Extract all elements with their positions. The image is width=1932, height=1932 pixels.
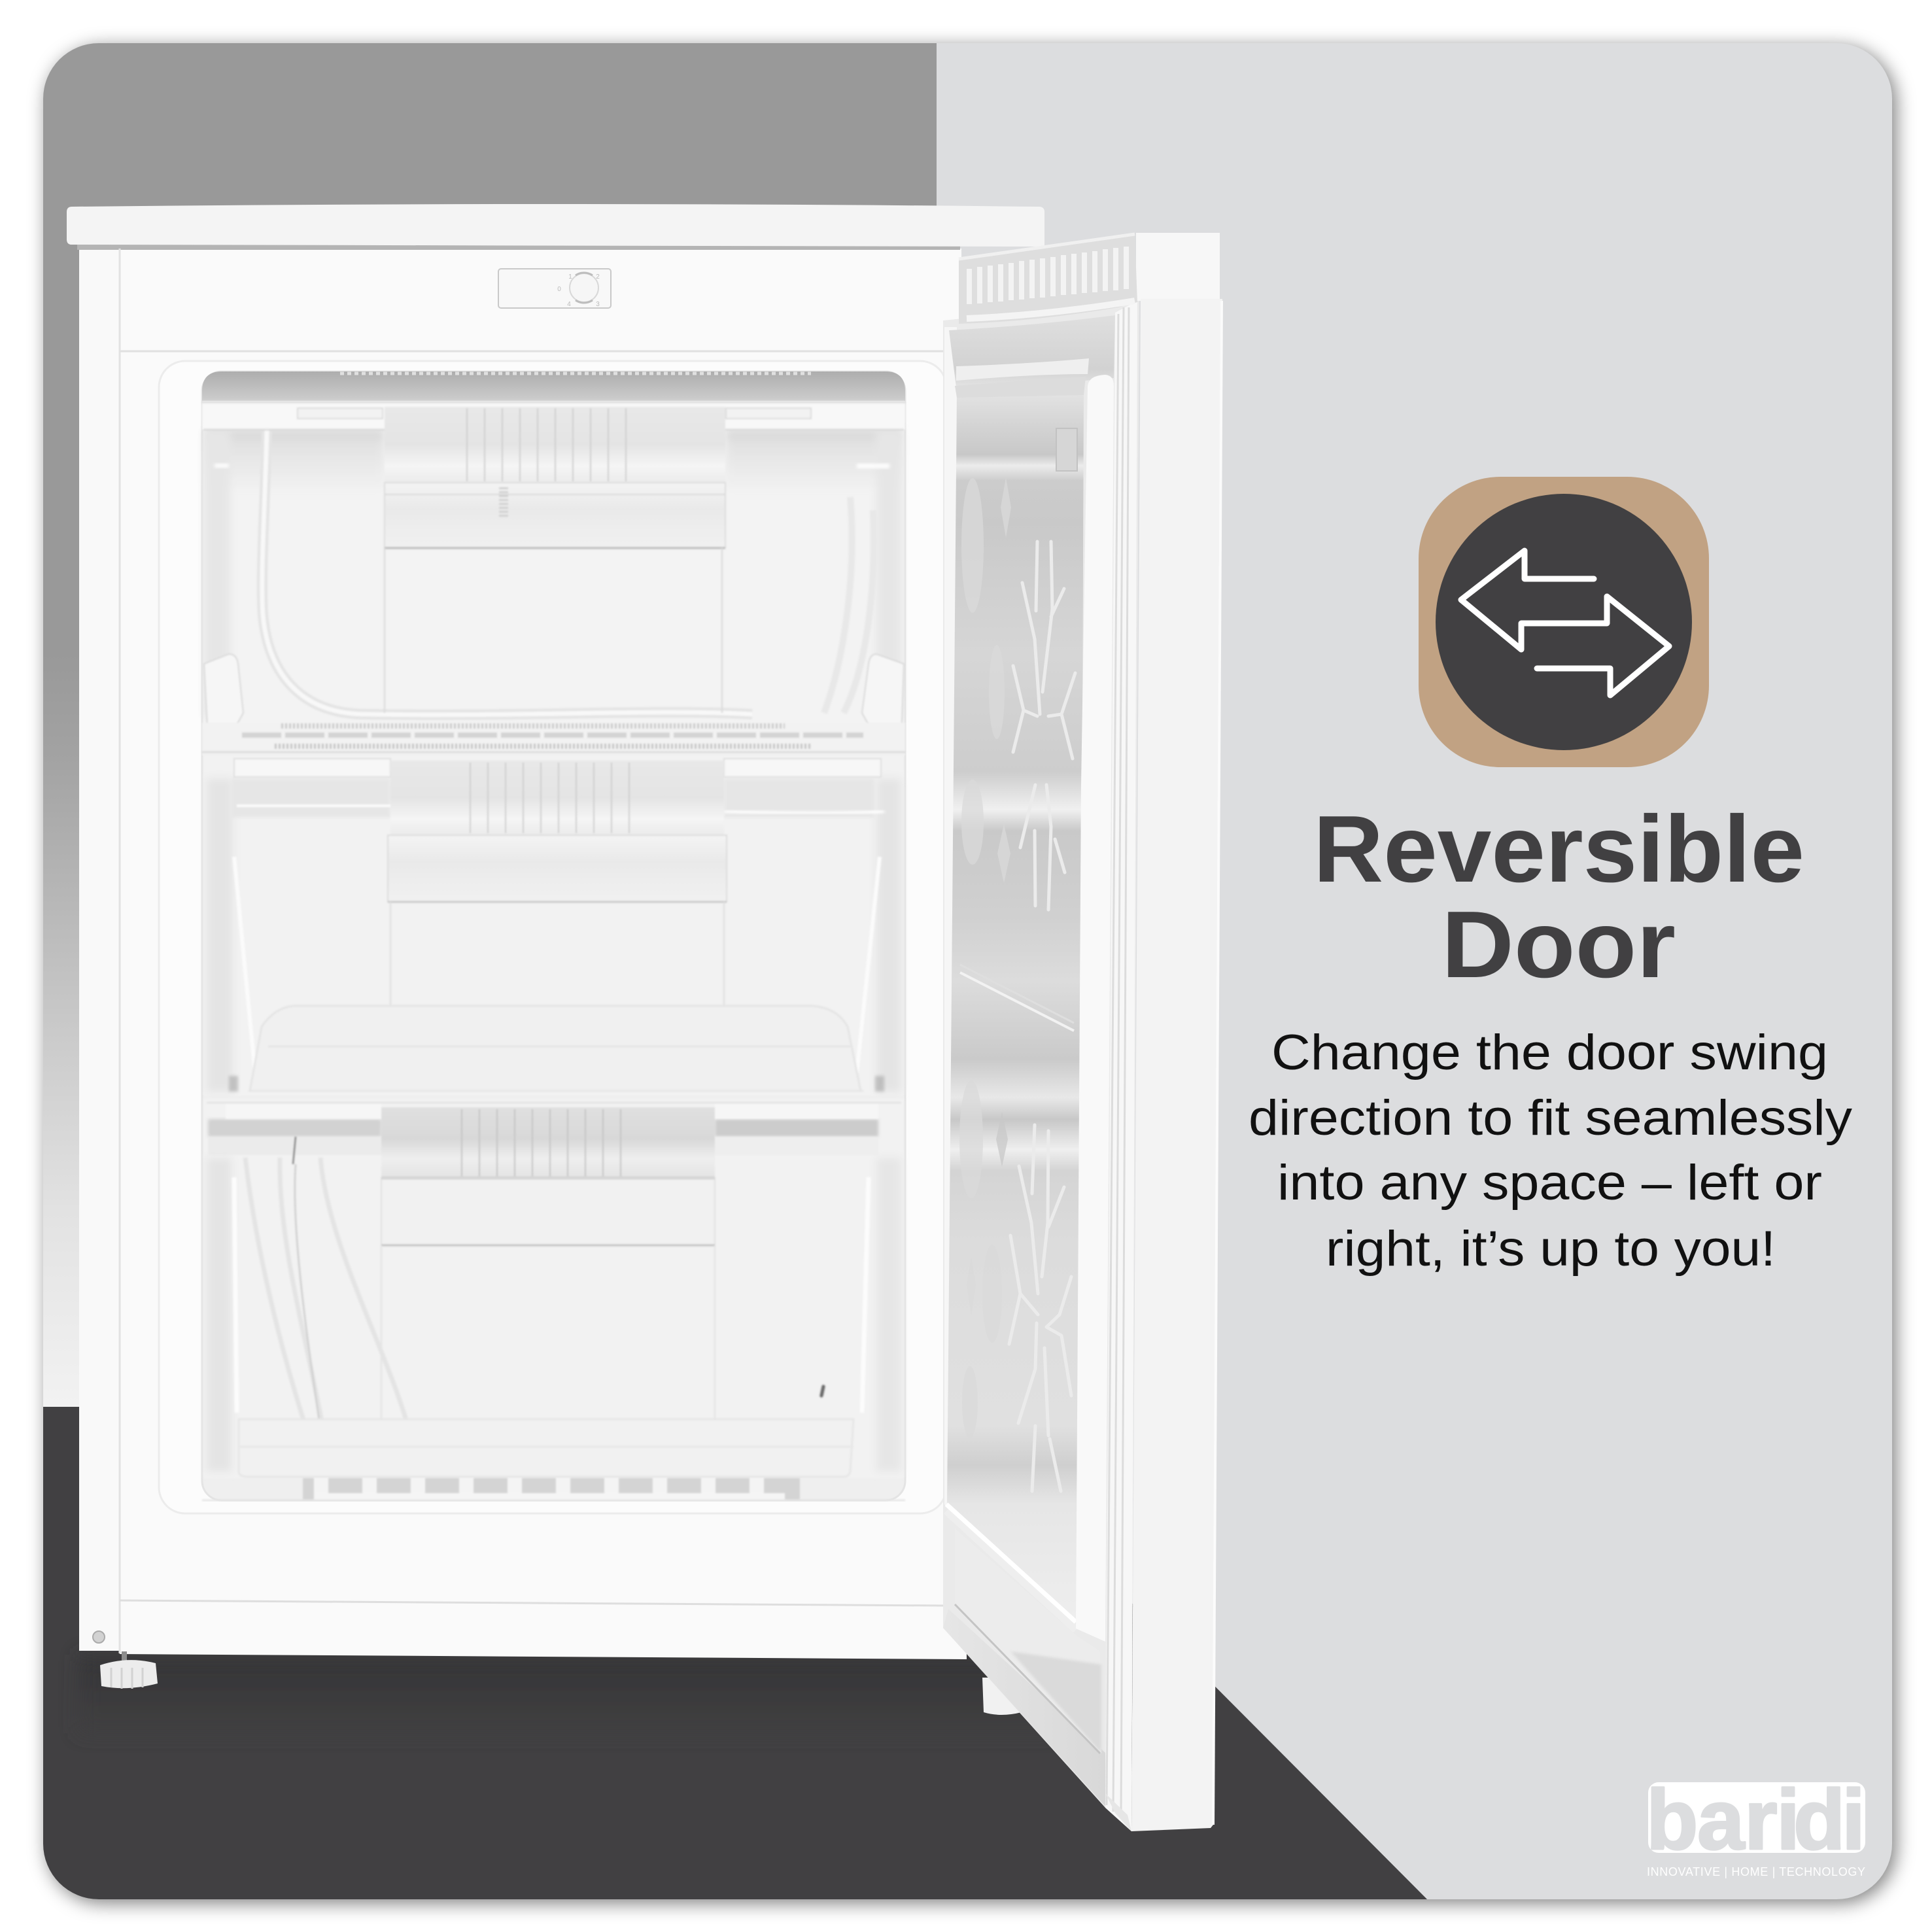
refrigerant tubes xyxy=(245,1158,409,1432)
shadow line under worktop xyxy=(77,243,960,250)
bottom vent xyxy=(202,1478,905,1500)
door lower bracket strip xyxy=(943,1609,1107,1808)
temperature dial xyxy=(498,269,611,308)
top band sides xyxy=(232,778,390,818)
drawer 2 xyxy=(203,755,904,1095)
temperature dial: 1 xyxy=(568,273,572,281)
door outer face xyxy=(1131,299,1222,1831)
wire shelf 1 xyxy=(202,723,905,755)
left side strip xyxy=(79,246,120,1651)
handle xyxy=(390,761,724,835)
freezer body xyxy=(67,204,1044,1659)
temperature dial: 2 xyxy=(596,273,600,281)
flange outline xyxy=(159,361,946,1513)
snowflake emboss xyxy=(1009,542,1075,1491)
door gasket xyxy=(1105,301,1137,1831)
drawer 3 xyxy=(203,1099,904,1478)
drawer vertical ribs xyxy=(385,548,722,713)
flip front xyxy=(385,483,725,547)
body text: Change the door swing xyxy=(1271,1025,1828,1080)
side wall reflections xyxy=(234,857,880,1073)
heading: Door xyxy=(1441,891,1676,997)
body text: direction to fit seamlessly xyxy=(1249,1090,1852,1146)
door inner logo emboss xyxy=(1056,428,1077,471)
embossed shapes xyxy=(959,477,1011,1438)
door white lower diagonal highlight xyxy=(946,1511,1076,1630)
heading: Reversible xyxy=(1313,796,1804,902)
side edge line xyxy=(119,249,120,1653)
bottom tray xyxy=(250,1006,861,1091)
mark on drawer xyxy=(821,1387,823,1396)
handle xyxy=(385,407,725,483)
hinge clips xyxy=(204,654,243,739)
temperature dial: 4 xyxy=(567,301,571,308)
screw xyxy=(93,1631,105,1643)
icon: swap arrows xyxy=(1419,477,1709,767)
body text xyxy=(1249,1025,1852,1277)
hinge cover xyxy=(959,233,1137,324)
door top recess xyxy=(949,315,1115,392)
highlights xyxy=(215,464,229,468)
temperature dial: 3 xyxy=(596,301,600,308)
flip front xyxy=(381,1178,715,1245)
door white lip xyxy=(1076,375,1114,1642)
glass highlights xyxy=(234,1177,869,1413)
front lip xyxy=(202,401,905,430)
door inside lower wall xyxy=(955,1528,1101,1753)
door outer face upper cap xyxy=(1136,233,1220,301)
door xyxy=(943,233,1222,1831)
interior top band xyxy=(202,371,905,401)
drawer 1 xyxy=(202,401,905,739)
refrigerant tubing xyxy=(262,430,752,715)
floor shade under freezer xyxy=(78,1655,1060,1733)
body text: into any space – left or xyxy=(1277,1155,1822,1211)
right foot xyxy=(982,1678,1022,1715)
door left white edge xyxy=(944,327,957,1517)
heading xyxy=(1313,796,1804,997)
bottom tray xyxy=(239,1419,854,1477)
logo: baridi: INNOVATIVE | HOME | TECHNOLOGY xyxy=(1647,1865,1865,1878)
front face xyxy=(120,249,967,1659)
door solid base xyxy=(943,301,1139,1831)
flip front xyxy=(388,835,727,902)
worktop xyxy=(67,204,1044,247)
base plinth line xyxy=(120,1600,946,1606)
handle xyxy=(381,1107,715,1178)
control panel strip divider xyxy=(120,351,946,352)
logo: baridi: baridi xyxy=(1646,1772,1865,1867)
back wall grey xyxy=(43,43,937,1407)
front lip and dark band xyxy=(208,1119,381,1137)
body text: right, it’s up to you! xyxy=(1326,1221,1776,1277)
temperature dial: 0 xyxy=(557,286,561,293)
floor xyxy=(43,1407,1427,1899)
interior cavity xyxy=(202,371,905,1500)
left foot xyxy=(100,1651,158,1689)
door inner window xyxy=(947,390,1084,1629)
